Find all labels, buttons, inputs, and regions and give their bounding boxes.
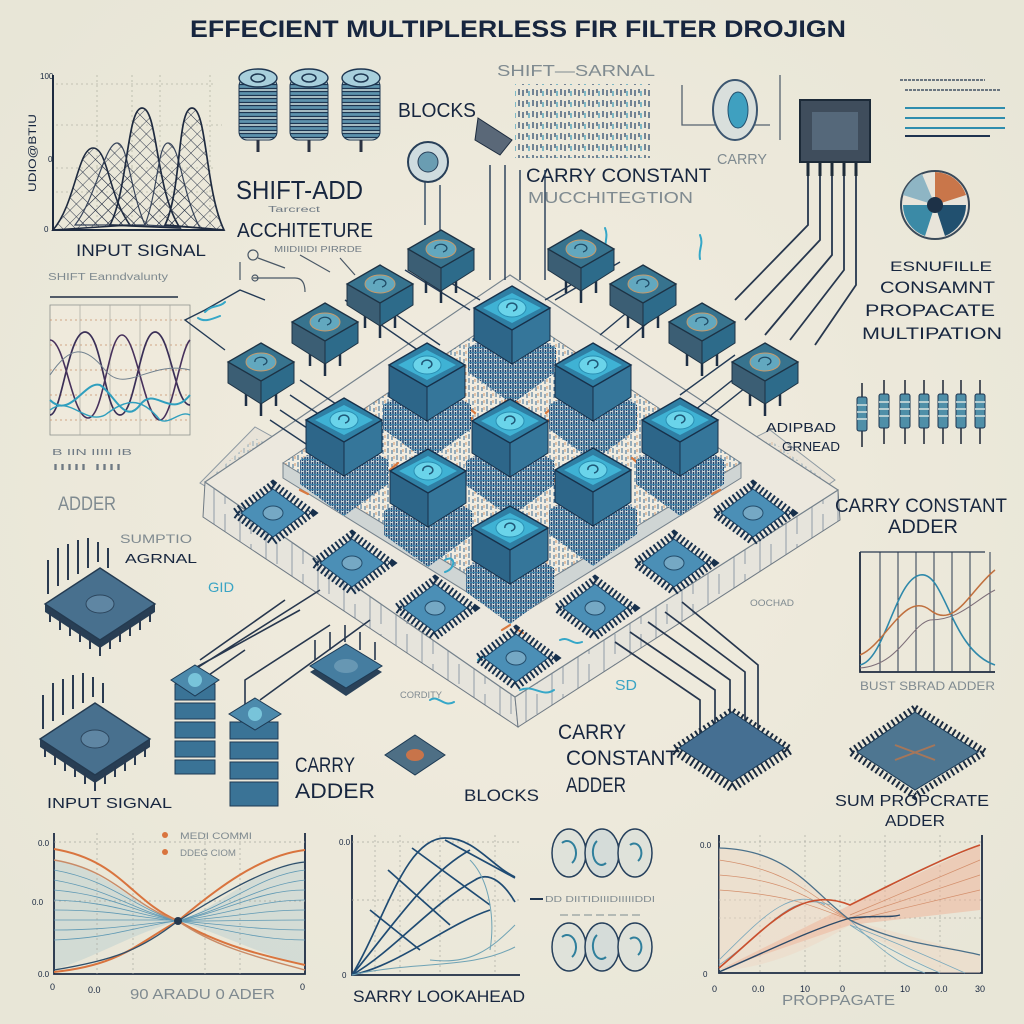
icon: upper discs: [552, 829, 652, 877]
chart: bottom right propagate: 0: [840, 984, 845, 994]
label: shift-add architecture: MIIDIIIDI PIRRDE: [274, 245, 362, 254]
chart: shift wave panel: [48, 272, 190, 435]
top right chip with wires: [735, 100, 870, 345]
chart: bottom right propagate: 0: [712, 984, 717, 994]
wires bottom left: [178, 590, 370, 710]
chart: input signal peaks: [27, 72, 224, 234]
wires across platform: [185, 165, 755, 450]
label: carry constant adder center: CARRY: [558, 721, 626, 744]
icon: small chip center: [385, 735, 445, 775]
label: sumptio signal: [120, 532, 197, 566]
chart: bottom left crossover: 0.0: [32, 898, 44, 907]
label: shift signal: SHIFT—SARNAL: [497, 63, 655, 80]
chart: bottom right propagate: [700, 835, 985, 994]
title: EFFECIENT MULTIPLERLESS FIR FILTER DROJIGN: [190, 16, 846, 43]
chart: bottom left crossover: DDEG CIOM: [180, 848, 236, 858]
label: shift-add architecture: [236, 175, 373, 254]
bit label between discs: [530, 895, 655, 915]
label: carry lookahead: SARRY LOOKAHEAD: [353, 987, 525, 1006]
label: bust sbrad adder: BUST SBRAD ADDER: [860, 679, 995, 693]
chart: bottom right propagate: 0.0: [935, 984, 948, 994]
wires bottom right: [615, 602, 758, 760]
label: multiplication block: PROPACATE: [865, 301, 995, 320]
label: input signal lower: INPUT SIGNAL: [47, 795, 172, 812]
label: carry constant adder center: CONSTANT: [566, 747, 678, 770]
chart: bottom left crossover: 0: [50, 982, 55, 992]
teal glyph marks: [208, 579, 637, 694]
chart: bottom middle lookahead: 0: [342, 971, 347, 980]
icon: fan disc: [901, 171, 969, 239]
chart: right carry curves: [860, 552, 995, 672]
small cube row: [228, 230, 798, 416]
chart: bottom right propagate: 10: [800, 984, 810, 994]
icon: target circle: [408, 118, 512, 245]
label: sum propagate adder: SUM PROPCRATE: [835, 793, 989, 810]
label: carry constant adder right: CARRY CONSTANT: [835, 496, 1007, 517]
small notes left: IIIII IIII: [52, 463, 122, 472]
chart: bottom right propagate: 10: [900, 984, 910, 994]
teal glyph marks: GID: [208, 579, 234, 595]
text lines top right: [900, 80, 1005, 136]
label: multiplication block: CONSAMNT: [880, 278, 995, 297]
chart: input signal peaks: 0: [44, 225, 49, 234]
icon: block stacks: [171, 665, 281, 806]
label: sum propagate adder: [835, 793, 989, 830]
label: propagate: PROPPAGATE: [782, 992, 895, 1009]
chart: bottom middle lookahead: 0.0: [339, 838, 351, 847]
chart: bottom right propagate: 0: [703, 970, 708, 979]
label: multiplication block: [862, 258, 1002, 343]
central cube grid: [300, 286, 724, 624]
icon: right chip: [850, 708, 985, 796]
chart: bottom right propagate: 0.0: [700, 841, 712, 850]
icon: carry device: CARRY: [717, 151, 767, 168]
label: carry adder: ADDER: [295, 780, 375, 803]
bit label between discs: DD DIITIDIIIDIIIIIDDI: [545, 895, 655, 904]
chart: bottom left crossover: MEDI COMMI: [180, 831, 252, 841]
label: carry constant adder center: ADDER: [566, 774, 626, 797]
chart: bottom middle lookahead: [339, 835, 520, 980]
label: carry constant architecture: MUCCHITEGTION: [528, 190, 693, 207]
chart: shift wave panel: SHIFT Eanndvalunty: [48, 272, 168, 283]
label: blocks lower: BLOCKS: [464, 786, 539, 805]
chart: bottom right propagate: 0.0: [752, 984, 765, 994]
icon: three coil stacks: [239, 69, 380, 152]
label: adder ahead: [766, 420, 840, 454]
icon: right chip center: [674, 712, 790, 788]
label: multiplication block: ESNUFILLE: [890, 258, 992, 274]
label: input signal: INPUT SIGNAL: [76, 241, 206, 260]
label: carry constant adder right: ADDER: [888, 517, 958, 538]
chart: bottom left crossover: 90 ARADU 0 ADER: [130, 986, 275, 1003]
chart: bottom left crossover: 0: [300, 982, 305, 992]
small notes left: [52, 448, 132, 472]
chart: bottom right propagate: 30: [975, 984, 985, 994]
icon: small chip: [310, 625, 382, 696]
small notes on platform edge: [400, 598, 795, 700]
icon: carry device: [682, 75, 780, 168]
block grid of shift signal: [515, 84, 650, 158]
chip row on platform: [235, 485, 791, 686]
label: blocks top: BLOCKS: [398, 100, 476, 122]
label: adder ahead: ADIPBAD: [766, 420, 836, 435]
label: shift-add architecture: SHIFT-ADD: [236, 175, 363, 205]
label: adder left: ADDER: [58, 494, 116, 515]
label: carry constant architecture: CARRY CONSTANT: [526, 166, 711, 187]
chart: bottom left crossover: 0.0: [88, 985, 101, 995]
small notes on platform edge: CORDITY: [400, 690, 442, 700]
chart: input signal peaks: UDIO@BTIU: [27, 114, 39, 192]
small notes left: B IIN IIIII IB: [52, 448, 132, 457]
label: shift-add architecture: ACCHITETURE: [237, 220, 373, 242]
chart: input signal peaks: 100: [40, 72, 54, 81]
label: carry adder: [295, 754, 375, 803]
chart: bottom left crossover: [32, 831, 305, 1003]
label: multiplication block: MULTIPATION: [862, 324, 1002, 343]
teal glyph marks: SD: [615, 677, 637, 694]
icon: lower discs: [552, 923, 652, 971]
label: carry adder: CARRY: [295, 754, 355, 777]
label: carry constant adder right: [835, 496, 1007, 538]
icon: left chip lower: [40, 673, 150, 791]
small notes on platform edge: OOCHAD: [750, 598, 795, 608]
label: shift-add architecture: Tarcrect: [268, 205, 321, 214]
label: adder ahead: GRNEAD: [782, 439, 840, 454]
label: carry constant architecture: [526, 166, 711, 207]
chart: input signal peaks: 0: [48, 155, 53, 164]
chart: bottom left crossover: 0.0: [38, 839, 50, 848]
platform base: [200, 275, 840, 727]
small schematic notes under architecture: [240, 250, 355, 292]
label: carry constant adder center: [558, 721, 678, 797]
clutter: orange and teal traces: [198, 228, 720, 704]
icon: left chip upper: [45, 538, 155, 656]
label: sumptio signal: SUMPTIO: [120, 532, 192, 546]
chart: bottom left crossover: 0.0: [38, 970, 50, 979]
icon: resistor row: [857, 380, 985, 447]
label: sumptio signal: AGRNAL: [125, 551, 197, 566]
label: sum propagate adder: ADDER: [885, 813, 945, 830]
